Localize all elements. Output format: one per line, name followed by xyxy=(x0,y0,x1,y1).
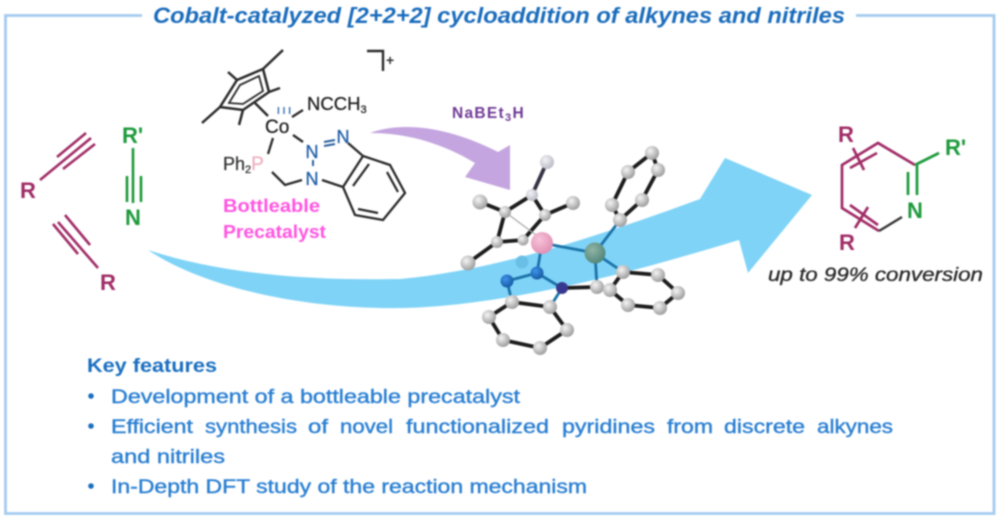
heading: key features: Key features xyxy=(87,355,217,377)
Cp* ligand xyxy=(202,50,283,125)
title: Cobalt-catalyzed [2+2+2] cycloaddition of alkynes and nitriles xyxy=(153,3,845,28)
label: NaBEt3H: H xyxy=(512,105,525,122)
label: Co: Co xyxy=(265,117,289,138)
label: Bottleable Precatalyst: Bottleable xyxy=(223,196,320,216)
bonds and benzotriazole xyxy=(268,110,405,220)
bullet: synthesis: novel xyxy=(340,416,393,438)
alkyne: lower: R xyxy=(100,270,116,295)
label: Bottleable Precatalyst xyxy=(223,196,326,242)
label: oxidation state III: III xyxy=(277,106,291,117)
label: Ph2P: Ph xyxy=(223,154,245,174)
label: Ph2P: P xyxy=(251,154,264,175)
N=N and N-N bonds xyxy=(313,140,335,166)
label: conversion: up to 99% conversion xyxy=(768,265,983,286)
label: Ph2P: 2 xyxy=(245,164,251,176)
nitrile: R' xyxy=(122,123,143,148)
label: nitrogens: N xyxy=(306,142,318,162)
precatalyst structure xyxy=(202,50,405,220)
bullet: synthesis: from xyxy=(667,416,713,438)
bullet: synthesis: and nitriles xyxy=(111,446,225,468)
label: NCCH3: 3 xyxy=(360,104,367,116)
label: NCCH3: NCCH xyxy=(307,93,360,114)
label: substituents: N xyxy=(907,198,923,223)
bullet: synthesis xyxy=(88,416,893,468)
pyridine ring: C-N bond xyxy=(879,217,902,231)
atoms xyxy=(460,146,685,355)
bullet: precatalyst: Development of a bottleable precatalyst xyxy=(111,386,521,408)
charge bracket xyxy=(367,51,394,71)
arrow: large blue reaction arrow xyxy=(148,158,812,308)
label: substituents: R xyxy=(839,230,855,255)
charge bracket: + xyxy=(386,52,394,68)
bullet: synthesis: discrete xyxy=(724,416,805,438)
bullet: synthesis: functionalized xyxy=(406,416,549,438)
label: substituents xyxy=(838,122,966,255)
label: nitrogens: N xyxy=(336,127,350,147)
bullet: synthesis: pyridines xyxy=(562,416,655,438)
bullet: synthesis: alkynes xyxy=(817,416,893,438)
reactants: alkynes and nitrile xyxy=(20,123,143,295)
3D molecular model xyxy=(460,146,685,355)
label: substituents: R xyxy=(838,122,854,147)
alkyne: lower xyxy=(53,215,116,295)
bullet: DFT study: In-Depth DFT study of the reaction mechanism xyxy=(111,476,587,498)
label: NaBEt3H: NaBEt xyxy=(452,105,505,122)
alkyne: upper xyxy=(20,133,95,203)
bullet: synthesis: Efficient xyxy=(111,416,194,438)
arrow: purple activation arrow xyxy=(370,127,510,190)
key features xyxy=(87,355,893,498)
bullet: synthesis: of xyxy=(308,416,329,438)
coordination bonds xyxy=(507,220,623,307)
nitrile: N xyxy=(125,205,141,230)
label: NaBEt3H: 3 xyxy=(505,112,512,124)
label: substituents: R' xyxy=(945,135,966,160)
pyridine ring: green bonds xyxy=(908,153,939,195)
label: nitrogens: N xyxy=(306,169,318,189)
nitrile xyxy=(122,123,143,230)
pyridine ring: carbon skeleton xyxy=(842,143,915,231)
label: Bottleable Precatalyst: Precatalyst xyxy=(223,222,326,242)
bullet: synthesis: synthesis xyxy=(205,416,297,438)
model bonds xyxy=(468,153,678,348)
product: substituted pyridine xyxy=(838,122,966,255)
label: nitrogens xyxy=(306,127,350,189)
alkyne: upper: R xyxy=(20,178,36,203)
